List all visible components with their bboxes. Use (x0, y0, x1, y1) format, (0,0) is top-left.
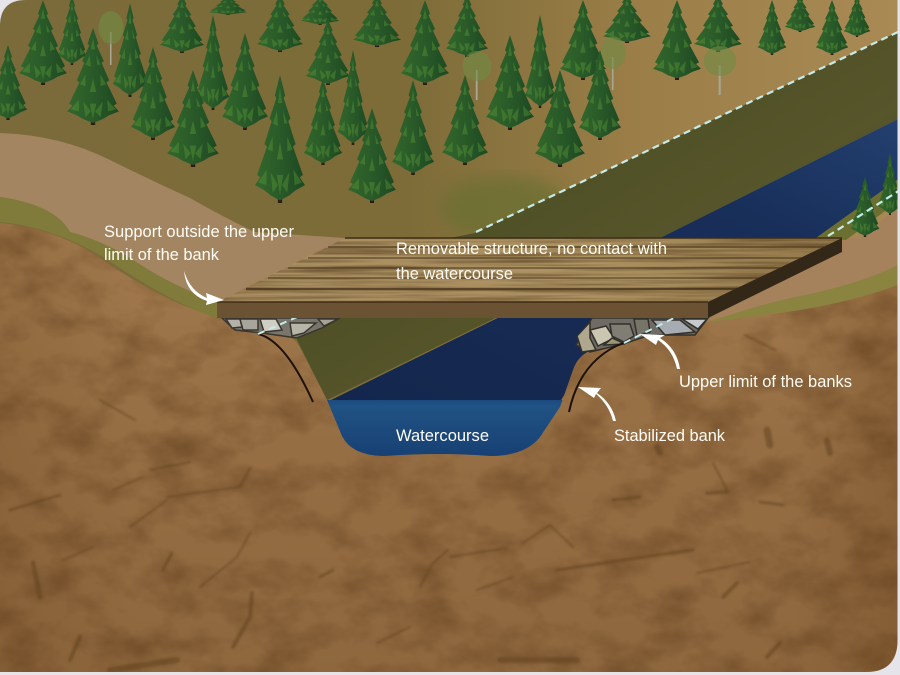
right bank surface (708, 178, 900, 326)
label: support outside the upper limit of the bank: limit of the bank (104, 245, 219, 264)
far bank of the watercourse (297, 31, 900, 400)
background: meadow hillside (0, 0, 900, 420)
stabilized bank line left (258, 334, 313, 402)
dashed upper limit of banks, right side (828, 190, 900, 236)
label: support outside the upper limit of the bank (104, 225, 294, 260)
arrow: support outside the upper limit (184, 271, 224, 305)
dashed upper limit of banks, far side (476, 31, 900, 232)
label: upper limit of the banks: Upper limit of the banks (679, 372, 852, 391)
label: support outside the upper limit of the bank: Support outside the upper (104, 222, 294, 241)
arrow: upper limit of the banks (640, 334, 680, 369)
trees on the hillside (0, 0, 900, 237)
grass strip on left bank edge (0, 197, 217, 320)
label: removable structure: the watercourse (396, 264, 513, 283)
dirt path along the left bank (0, 133, 345, 305)
left abutment stones (222, 318, 340, 338)
label: stabilized bank: Stabilized bank (614, 426, 725, 445)
arrow: stabilized bank (578, 387, 616, 421)
river receding into the distance (327, 118, 900, 402)
label: watercourse: Watercourse (396, 426, 489, 445)
label: removable structure: Removable structure, no contact with (396, 239, 667, 258)
stabilized bank line right (569, 343, 623, 412)
bridge deck: removable structure (217, 238, 842, 318)
water in the cross-section channel (327, 400, 562, 456)
dashed upper limit of banks, under deck (258, 318, 674, 344)
soil cracks (10, 335, 830, 670)
label: removable structure (396, 242, 666, 279)
right abutment stones (576, 318, 708, 352)
soil cross-section (0, 223, 900, 675)
